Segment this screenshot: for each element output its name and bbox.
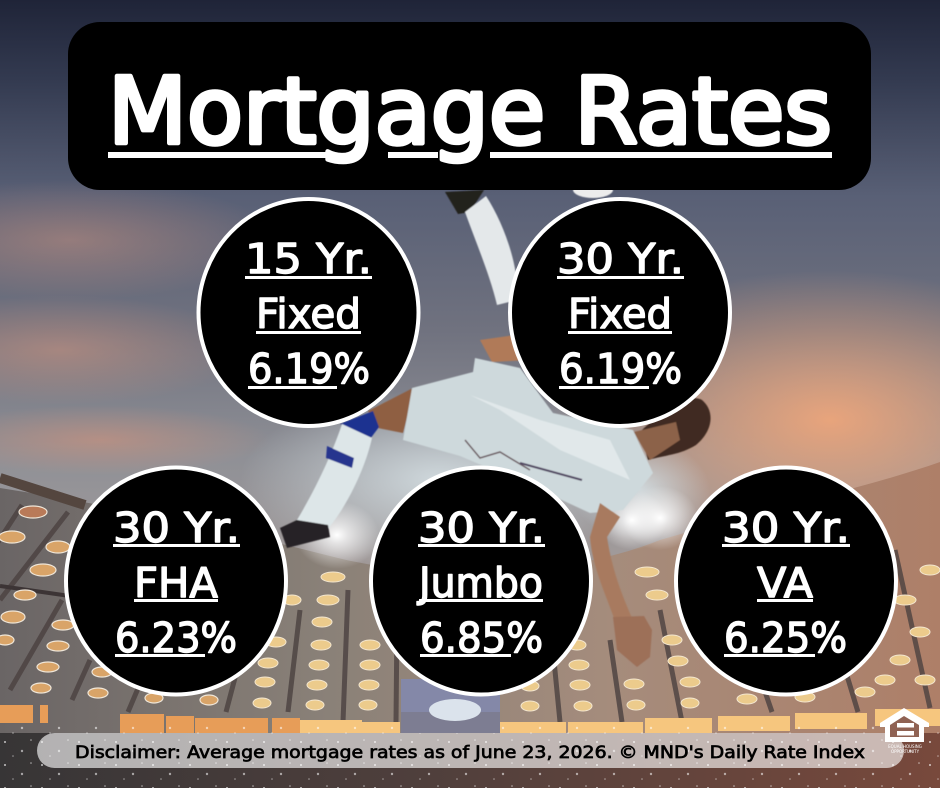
lower leg skin (368, 387, 415, 433)
rate circle: 30 Yr. Jumbo: 6.85% (420, 614, 543, 662)
rate circle: 30 Yr. VA: 6.25% (724, 614, 847, 662)
rate circle: 30 Yr. FHA: FHA (134, 559, 218, 607)
rate circle: 30 Yr. Fixed: Fixed (568, 290, 672, 338)
disclaimer bar (37, 733, 904, 768)
big stadium screen (401, 679, 500, 733)
lower boot (280, 520, 330, 548)
lower leg sock (297, 424, 372, 531)
raised thigh (480, 335, 530, 362)
raised leg sock (465, 196, 517, 305)
title text: Mortgage Rates (108, 58, 832, 165)
blue sock band (340, 411, 379, 439)
icon: equal housing opportunity: OPPORTUNITY (891, 749, 920, 754)
rate circle: 30 Yr. FHA (66, 468, 286, 694)
hand (613, 616, 652, 667)
rate circle: 30 Yr. Fixed: 30 Yr. (557, 235, 684, 283)
rate circle: 30 Yr. Fixed (510, 199, 730, 426)
rate circle: 30 Yr. VA: VA (757, 559, 813, 607)
background: lit stadium band and crowd (0, 705, 940, 788)
rate circle: 15 Yr. Fixed (198, 199, 418, 426)
arm (590, 503, 632, 618)
background: stadium roof (0, 462, 940, 735)
football player (280, 182, 711, 667)
rate circle: 30 Yr. VA (676, 468, 896, 694)
rate circle: 30 Yr. FHA: 30 Yr. (113, 504, 240, 552)
background: stadium roof lights (0, 506, 940, 711)
rate circle: 30 Yr. Jumbo (371, 468, 591, 694)
disclaimer text: Disclaimer: Average mortgage rates as of June 23, 2026. © MND's Daily Rate Index (75, 743, 865, 762)
rate circle: 30 Yr. Jumbo: 30 Yr. (418, 504, 545, 552)
rate circle: 30 Yr. VA: 30 Yr. (722, 504, 850, 552)
rate circle: 30 Yr. Jumbo: Jumbo (416, 559, 543, 607)
rate circle: 30 Yr. FHA: 6.23% (115, 614, 237, 662)
icon: equal housing opportunity (880, 708, 929, 754)
rate circle: 30 Yr. Fixed: 6.19% (559, 345, 682, 393)
ear and neck (634, 422, 680, 460)
stadium floodlights (295, 486, 698, 569)
title underline (108, 152, 832, 158)
head (640, 398, 711, 460)
icon: equal housing opportunity: EQUAL HOUSING (888, 744, 922, 749)
raised boot (445, 190, 484, 214)
rate circle: 15 Yr. Fixed: Fixed (256, 290, 361, 338)
rate circle: 15 Yr. Fixed: 6.19% (248, 345, 370, 393)
title panel (68, 22, 871, 190)
ball (573, 182, 613, 198)
rate circle: 15 Yr. Fixed: 15 Yr. (245, 235, 372, 283)
shirt and shorts (403, 358, 653, 513)
